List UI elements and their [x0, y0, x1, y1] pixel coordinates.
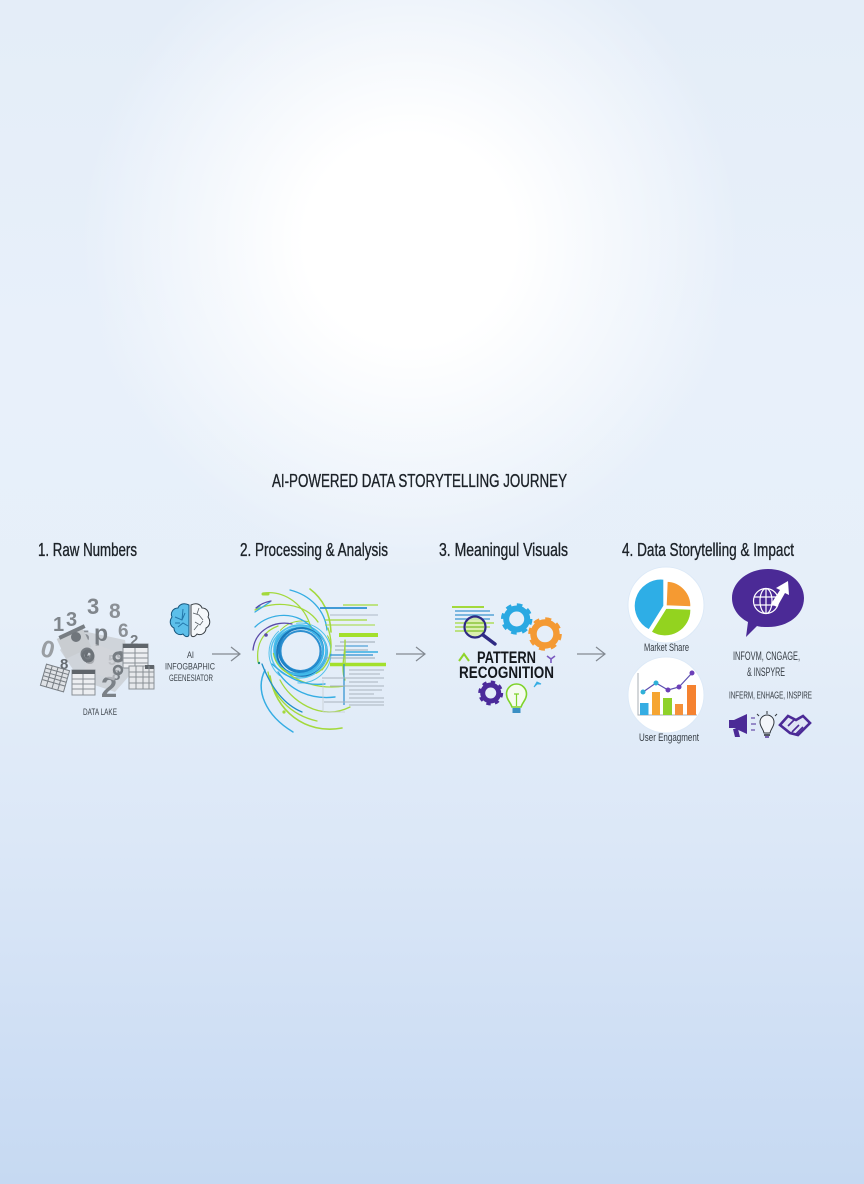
label: AI infographic generator	[165, 650, 215, 684]
trend line	[640, 670, 694, 694]
heading: step 3: 3. Meaningul Visuals	[439, 540, 568, 560]
icon: speech bubble with globe	[732, 569, 804, 637]
icon: data lake of numbers and tables: 9	[116, 649, 125, 666]
icon: data lake of numbers and tables: 8	[112, 667, 120, 684]
icon: data lake of numbers and tables: p	[94, 620, 108, 646]
label: data lake: DATA LAKE	[83, 707, 117, 718]
icon: data lake of numbers and tables: 3	[87, 594, 99, 619]
icon: handshake	[780, 716, 810, 735]
icon: data lake of numbers and tables: 5	[80, 627, 89, 646]
title: AI-POWERED DATA STORYTELLING JOURNEY	[272, 471, 567, 491]
icon: megaphone	[729, 714, 756, 737]
table: tilted	[40, 664, 70, 692]
label: AI infographic generator: AI	[187, 650, 194, 661]
arrow: step 1 to step 2	[212, 647, 240, 661]
text: inform, engage and inspire: INFOVM, CNGAGE,	[733, 651, 800, 663]
icon: green chevron	[459, 654, 469, 661]
bars	[640, 685, 696, 715]
icon: data lake of numbers and tables: 5	[108, 652, 116, 669]
data text panel	[320, 605, 386, 712]
icon: data lake of numbers and tables	[38, 594, 154, 704]
pie slices	[634, 579, 691, 636]
text: pattern recognition: PATTERN	[477, 648, 536, 667]
icon: data lake of numbers and tables: 6	[118, 621, 129, 642]
arrow: step 3 to step 4	[577, 647, 605, 661]
label: AI infographic generator: INFOGBAPHIC	[165, 662, 215, 672]
icon: blue gear	[503, 605, 531, 633]
swirl arcs	[253, 589, 350, 732]
panel: user engagement chart	[628, 657, 704, 733]
icon: data lake of numbers and tables: 8	[60, 656, 68, 673]
text: inform, engage and inspire	[733, 651, 800, 679]
text: inform, engage and inspire: & INSPYRE	[747, 667, 785, 679]
label: market share: Market Share	[644, 642, 689, 654]
table: front	[72, 670, 95, 695]
icon: data lake of numbers and tables: 3	[66, 609, 77, 631]
growth arrow	[771, 581, 789, 607]
icon: data lake of numbers and tables: 6	[84, 647, 95, 669]
icon: orange gear	[530, 619, 560, 649]
text: inform, engage, inspire: INFERM, ENHAGE, INSPIRE	[729, 690, 812, 702]
icon: data lake of numbers and tables: 0	[38, 635, 58, 665]
text: pattern recognition: RECOGNITION	[459, 663, 554, 682]
heading: step 1: 1. Raw Numbers	[38, 540, 137, 560]
panel: market share pie	[628, 567, 704, 643]
icon: data lake of numbers and tables: 8	[109, 600, 121, 623]
label: AI infographic generator: GEENESIATOR	[169, 673, 213, 684]
text: pattern recognition	[459, 648, 554, 682]
chart: data swirl	[253, 589, 386, 732]
label: user engagement: User Engagment	[639, 732, 699, 744]
globe	[754, 588, 778, 614]
icon: data lake of numbers and tables: 1	[53, 614, 64, 636]
icon: data lake of numbers and tables: 2	[101, 672, 117, 704]
table: upper right	[123, 644, 148, 668]
arrow: step 2 to step 3	[396, 647, 425, 661]
icon: idea bulb	[757, 711, 777, 737]
icon: small blue mark	[534, 682, 541, 687]
icon: data lake of numbers and tables: 2	[130, 632, 138, 649]
swirl rings	[269, 621, 331, 683]
icon: purple gear	[480, 682, 502, 704]
table: lower right	[129, 665, 154, 689]
icon: small purple mark	[547, 656, 555, 663]
heading: step 2: 2. Processing & Analysis	[240, 540, 388, 560]
icon: light bulb	[506, 684, 526, 713]
heading: step 4: 4. Data Storytelling & Impact	[622, 540, 794, 560]
icon: AI brain	[170, 604, 210, 637]
icon: document with magnifier	[452, 607, 495, 644]
